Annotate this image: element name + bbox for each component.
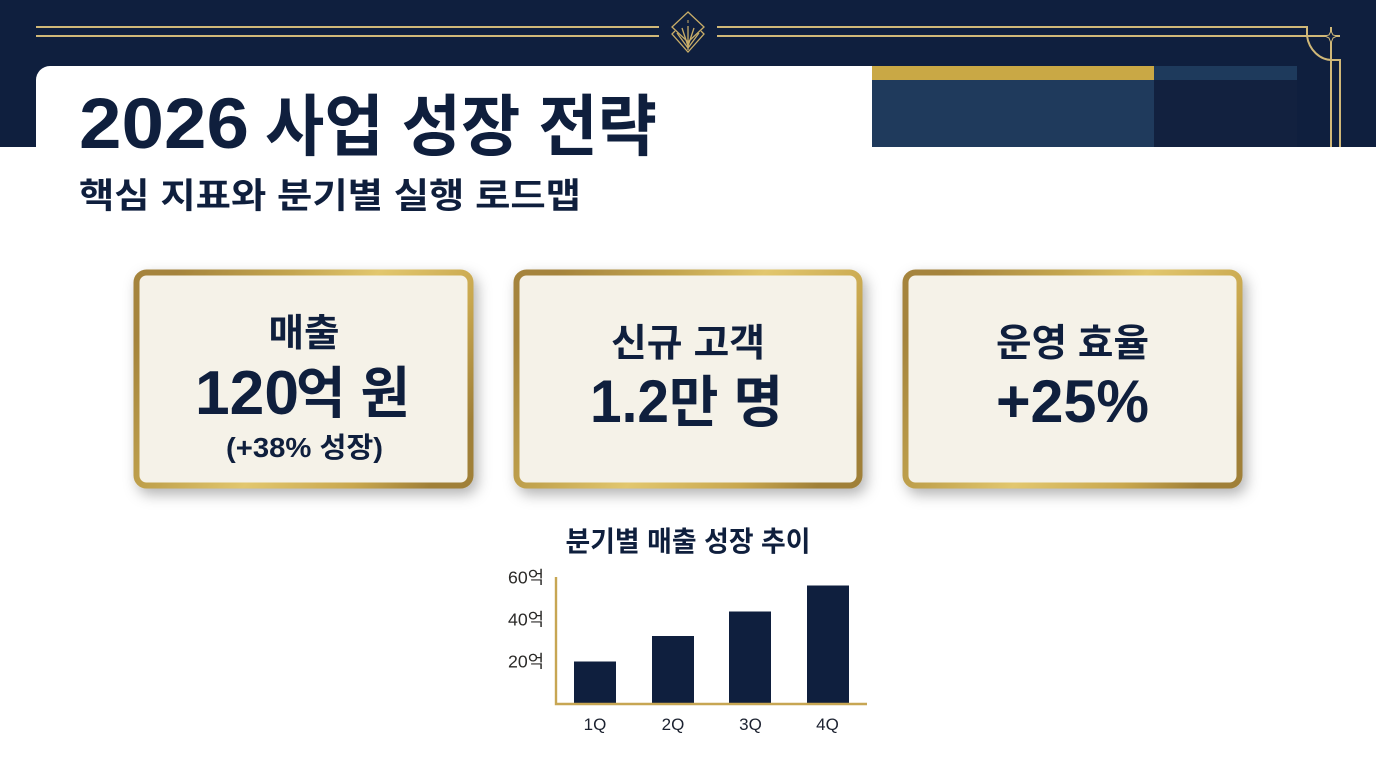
revenue value: 120 bbox=[195, 359, 299, 428]
revenue value bbox=[195, 349, 410, 430]
bar: 3Q bbox=[729, 612, 771, 704]
efficiency value: +25% bbox=[996, 368, 1149, 435]
y axis labels bbox=[508, 568, 544, 672]
title: 2026 bbox=[79, 85, 249, 164]
y axis labels: 40억 bbox=[508, 610, 544, 630]
chart heading: 분기별 매출 성장 추이 bbox=[566, 520, 810, 560]
y axis labels: 20억 bbox=[508, 652, 544, 672]
revenue value: 억 원 bbox=[296, 349, 410, 430]
header gold bar bbox=[872, 66, 1154, 80]
gold double rules right with corner bbox=[717, 27, 1340, 147]
efficiency label: 운영 효율 bbox=[996, 312, 1149, 367]
bar chart bbox=[508, 568, 867, 734]
bar: 4Q bbox=[807, 586, 849, 704]
chart axes bbox=[556, 577, 867, 704]
x axis labels bbox=[584, 715, 839, 734]
x axis labels: 4Q bbox=[816, 715, 839, 734]
new customers value: 1.2 bbox=[590, 368, 669, 435]
bar: 1Q bbox=[574, 662, 616, 704]
y axis labels: 60억 bbox=[508, 568, 544, 588]
header blue block bbox=[872, 80, 1154, 147]
new customers value bbox=[590, 358, 783, 439]
header blue strip bbox=[1154, 66, 1297, 80]
white title tab bbox=[36, 66, 872, 147]
title: 사업 성장 전략 bbox=[265, 73, 657, 170]
revenue growth note: (+38% 성장) bbox=[226, 432, 383, 463]
icon: diamond fan emblem bbox=[672, 12, 704, 52]
x axis labels: 2Q bbox=[662, 715, 684, 734]
header dark block bbox=[1154, 80, 1297, 147]
header band bbox=[0, 0, 1376, 147]
panel: new customers card bbox=[516, 272, 860, 486]
x axis labels: 1Q bbox=[584, 715, 606, 734]
gold double rules left bbox=[36, 27, 659, 36]
panel: revenue card bbox=[136, 272, 470, 486]
title bbox=[79, 73, 657, 170]
subtitle: 핵심 지표와 분기별 실행 로드맵 bbox=[79, 168, 581, 219]
revenue label: 매출 bbox=[268, 302, 340, 357]
panel: operating efficiency card bbox=[906, 272, 1240, 486]
x axis labels: 3Q bbox=[739, 715, 762, 734]
new customers value: 만 명 bbox=[669, 358, 783, 439]
bar: 2Q bbox=[652, 636, 694, 704]
new customers label: 신규 고객 bbox=[611, 312, 765, 367]
